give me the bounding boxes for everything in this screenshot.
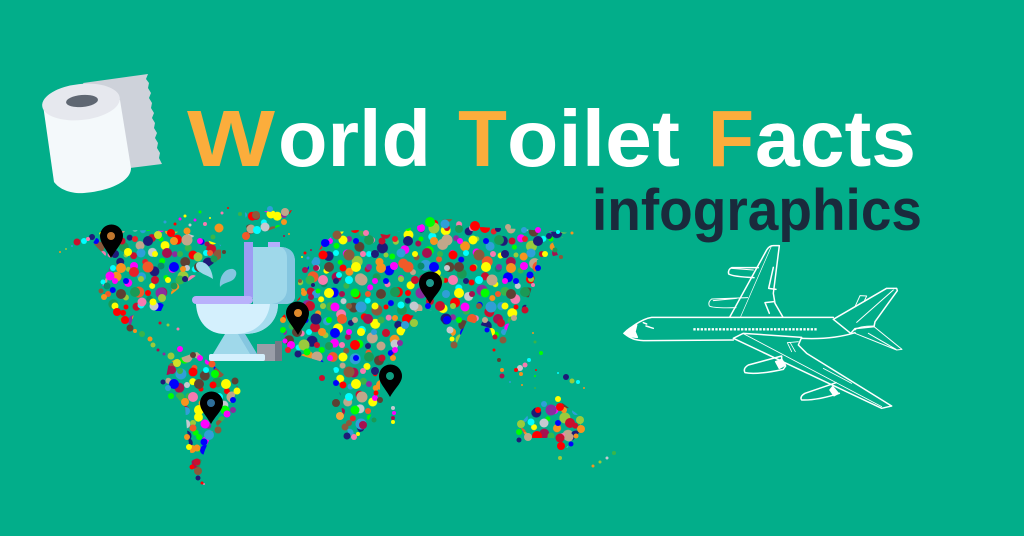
icon: map pin, south america (200, 392, 223, 424)
icon: toilet (192, 242, 295, 361)
europe fragments (283, 233, 312, 260)
title: orld (278, 94, 431, 183)
title: oilet (507, 94, 680, 183)
title: acts (755, 94, 916, 183)
title: W (187, 94, 276, 183)
south america (160, 346, 240, 485)
world map of coloured dots (59, 206, 616, 485)
icon: map pin, indian ocean (379, 364, 402, 397)
australia (516, 396, 585, 450)
icon: map pin, africa (286, 302, 309, 335)
asia pacific islands (391, 332, 616, 468)
title: T (458, 94, 507, 183)
eurasia and africa (280, 217, 574, 440)
icon: map pin, north america (100, 225, 123, 258)
icon: toilet paper roll (40, 74, 162, 193)
icon: map pin, asia (419, 272, 442, 304)
central america and arctic dots (59, 207, 229, 356)
title: F (708, 94, 754, 183)
north america (93, 228, 226, 332)
subtitle: infographics (592, 178, 922, 243)
title (187, 94, 916, 183)
icon: airplane outline (624, 246, 902, 408)
greenland (238, 206, 292, 240)
